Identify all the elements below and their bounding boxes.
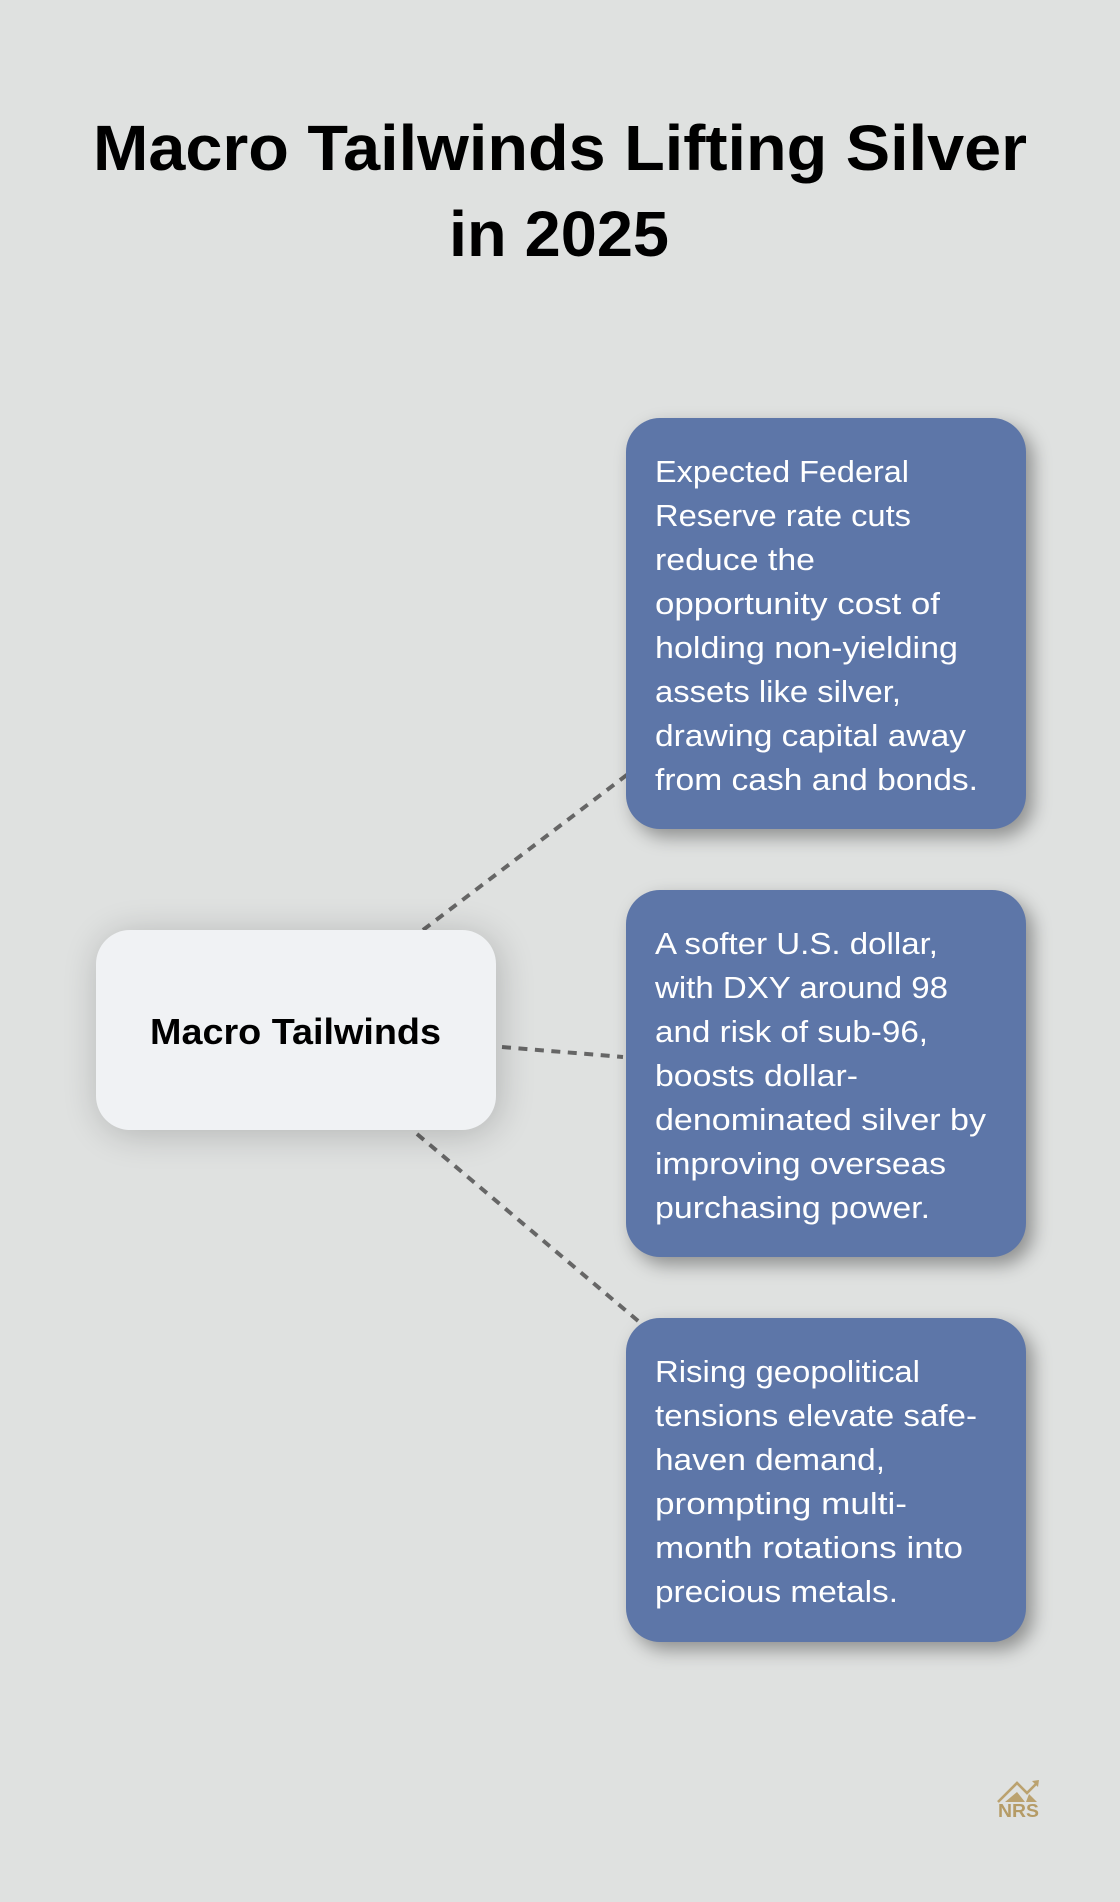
card: geopolitical tensions: Rising geopolitical (655, 1355, 920, 1389)
card: Federal Reserve rate cuts: assets like silver, (655, 675, 901, 709)
card: geopolitical tensions (626, 1318, 1026, 1642)
title: Macro Tailwinds Lifting Silver (93, 112, 1027, 184)
card: Federal Reserve rate cuts (626, 418, 1026, 829)
card: Federal Reserve rate cuts: holding non-yielding (655, 631, 958, 665)
central node: Macro Tailwinds: Macro Tailwinds (150, 1011, 441, 1052)
card: softer U.S. dollar: and risk of sub-96, (655, 1015, 928, 1049)
title: in 2025 (449, 198, 669, 270)
card: Federal Reserve rate cuts: reduce the (655, 543, 815, 577)
central node: Macro Tailwinds (96, 930, 496, 1130)
card: geopolitical tensions: prompting multi- (655, 1487, 907, 1521)
icon: NRS logo: NRS (998, 1801, 1039, 1821)
card: Federal Reserve rate cuts: from cash and bonds. (655, 763, 978, 797)
card: softer U.S. dollar (626, 890, 1026, 1257)
card: Federal Reserve rate cuts: opportunity cost of (655, 587, 941, 621)
card: softer U.S. dollar: with DXY around 98 (654, 971, 948, 1005)
card: geopolitical tensions: precious metals. (655, 1575, 898, 1609)
title (93, 112, 1027, 270)
card: softer U.S. dollar: A softer U.S. dollar, (655, 927, 938, 961)
card: softer U.S. dollar: improving overseas (655, 1147, 946, 1181)
card: softer U.S. dollar: boosts dollar- (655, 1059, 858, 1093)
card: Federal Reserve rate cuts: Expected Federal (655, 455, 909, 489)
card: geopolitical tensions: tensions elevate safe- (655, 1399, 977, 1433)
card: Federal Reserve rate cuts: Reserve rate cuts (655, 499, 911, 533)
card: softer U.S. dollar: denominated silver by (655, 1103, 987, 1137)
card: Federal Reserve rate cuts: drawing capital away (655, 719, 967, 753)
card: geopolitical tensions: month rotations into (655, 1531, 963, 1565)
card: softer U.S. dollar: purchasing power. (655, 1191, 930, 1225)
card: geopolitical tensions: haven demand, (655, 1443, 885, 1477)
